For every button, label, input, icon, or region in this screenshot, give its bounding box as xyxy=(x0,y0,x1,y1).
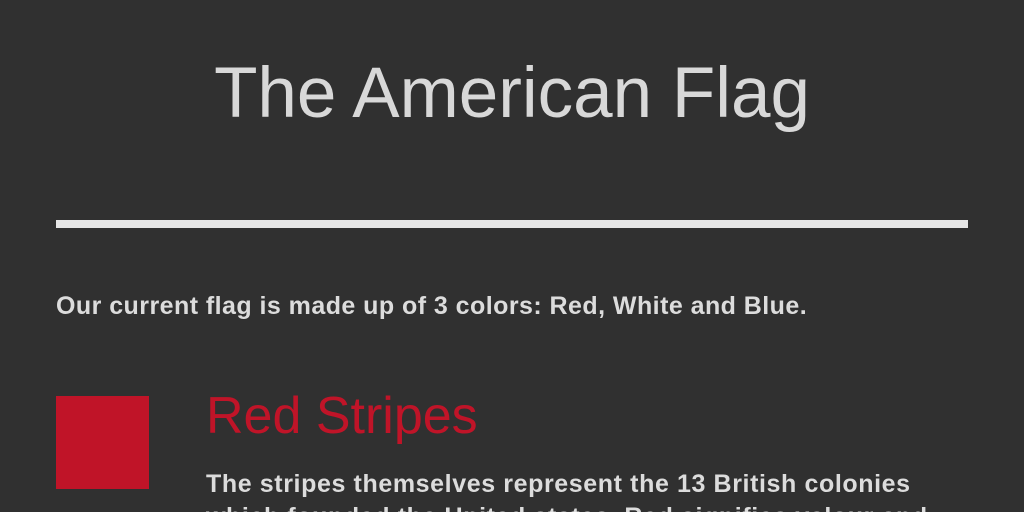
title: The American Flag xyxy=(214,54,810,133)
description text: The stripes themselves represent the 13 British colonies xyxy=(206,470,911,498)
section: red stripes xyxy=(56,388,928,512)
icon: red square xyxy=(56,396,149,489)
divider rule xyxy=(56,220,968,228)
heading: red stripes: Red Stripes xyxy=(206,388,478,445)
description text xyxy=(206,470,928,512)
intro text: Our current flag is made up of 3 colors: Red, White and Blue. xyxy=(56,292,807,320)
